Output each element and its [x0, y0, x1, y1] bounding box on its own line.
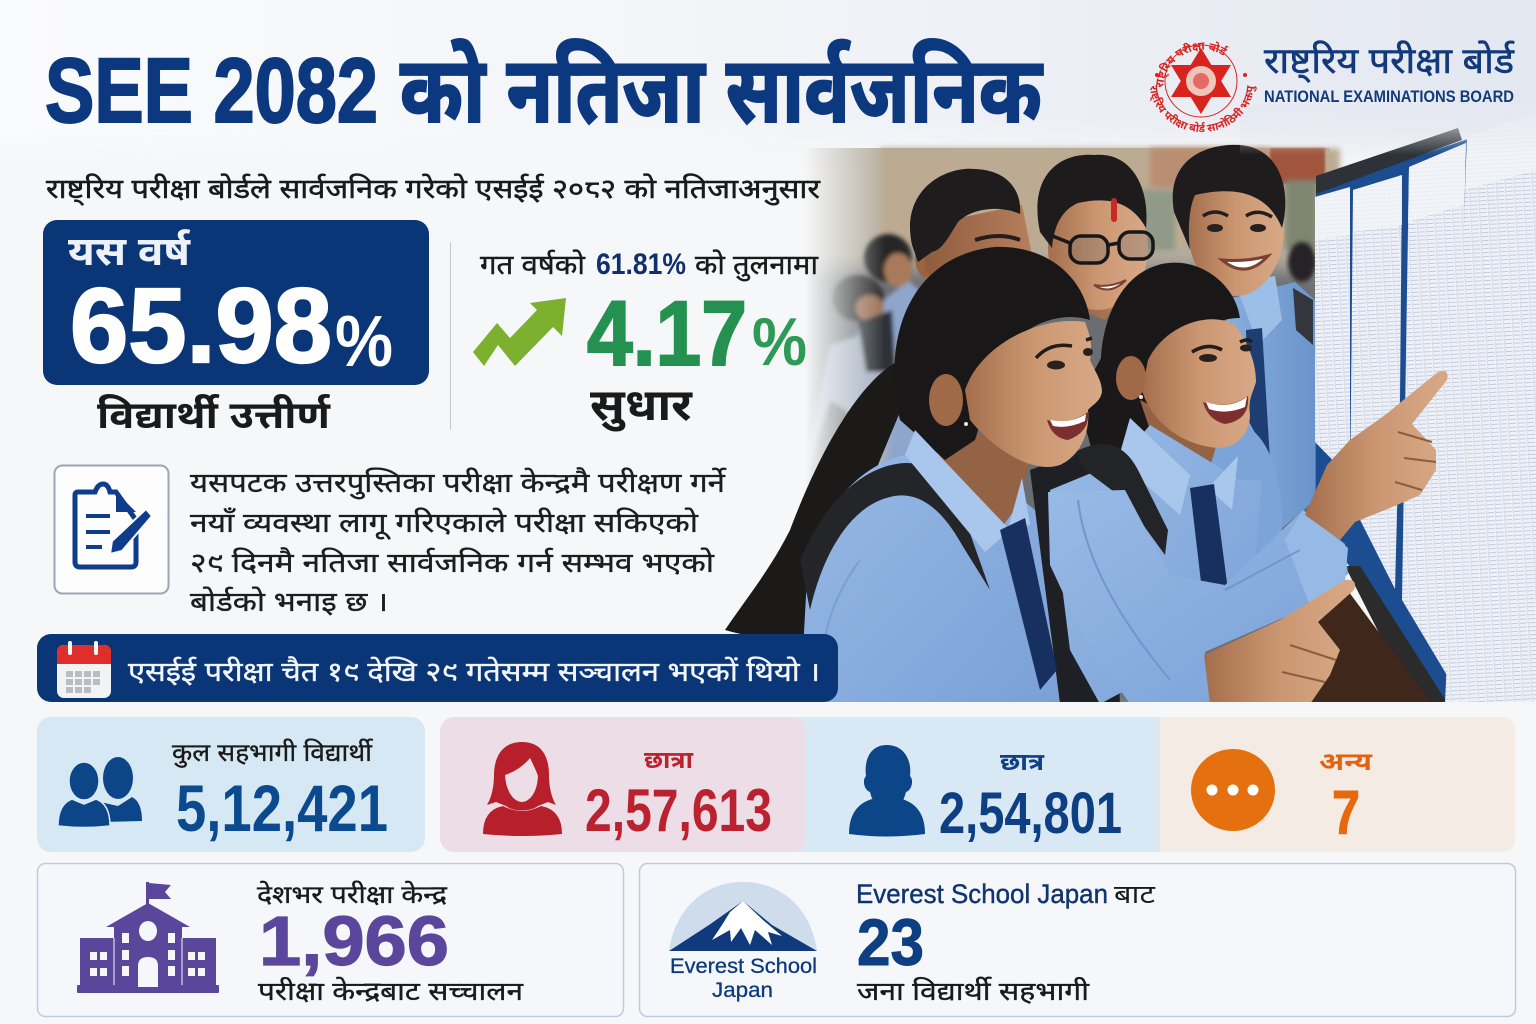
shirt body	[1050, 425, 1262, 704]
organisation name	[1264, 40, 1515, 106]
results sheet 1	[1315, 187, 1350, 478]
panel: exam centres	[38, 864, 624, 1016]
neck	[1140, 400, 1218, 500]
student: boy left	[910, 169, 1040, 300]
improvement figure: %	[752, 304, 807, 380]
text block: new evaluation system: यसपटक उत्तरपुस्तिका परीक्षा केन्द्रमै परीक्षण गर्ने	[190, 467, 727, 500]
panel: this year's pass rate: यस वर्ष	[68, 229, 191, 274]
hand: pointing lower	[1204, 580, 1355, 704]
callout banner: exam dates: एसईई परीक्षा चैत १९ देखि २९ गतेसम्म सञ्चालन भएकों थियो ।	[128, 656, 820, 687]
panel: Everest School Japan	[640, 864, 1516, 1016]
results sheet 3	[1402, 143, 1466, 677]
panel: Everest School Japan: बाट	[1114, 879, 1156, 909]
title: को नतिजा सार्वजनिक	[400, 39, 1043, 142]
backpack strap	[1075, 444, 1168, 555]
student: boy right	[1173, 145, 1315, 530]
panel: boys: 2,54,801	[939, 781, 1122, 846]
text block: new evaluation system: बोर्डको भनाइ छ ।	[190, 586, 388, 617]
label: improvement: सुधार	[590, 381, 694, 432]
callout banner: exam dates	[37, 634, 838, 702]
label: students passed: विद्यार्थी उत्तीर्ण	[97, 393, 332, 437]
photo: students reading results on notice board	[725, 105, 1536, 710]
ponytail	[725, 360, 905, 640]
panel: girls: 2,57,613	[585, 777, 772, 844]
panel: total students: 5,12,421	[176, 771, 388, 845]
collar	[905, 430, 1010, 552]
results sheet 4	[1445, 113, 1536, 704]
icon: calendar	[57, 641, 111, 698]
panel: boys	[780, 717, 1160, 852]
organisation name: राष्ट्रिय परीक्षा बोर्ड	[1264, 40, 1515, 83]
panel: total students: कुल सहभागी विद्यार्थी	[172, 738, 374, 768]
icon: female silhouette	[483, 742, 562, 836]
shoulder and far sleeve behind	[1180, 420, 1282, 640]
shirt	[800, 432, 1060, 704]
icon: two people	[58, 757, 142, 828]
logo: Everest School mountain: Japan	[712, 979, 773, 1002]
panel: boys: छात्र	[1000, 749, 1045, 776]
panel: others: 7	[1332, 779, 1360, 848]
icon: rising green arrow	[473, 298, 566, 366]
panel: exam centres: देशभर परीक्षा केन्द्र	[257, 879, 448, 909]
icon: male silhouette	[849, 745, 925, 836]
collar	[1118, 418, 1190, 515]
student: girl right	[1048, 263, 1348, 704]
title: SEE 2082	[45, 40, 378, 142]
hair	[1101, 263, 1240, 450]
sleeve raised to board	[1048, 490, 1348, 704]
panel: this year's pass rate	[43, 220, 429, 385]
comparison with last year	[480, 248, 819, 282]
panel: this year's pass rate: %	[335, 302, 393, 382]
strip below photo	[780, 702, 1536, 714]
panel: this year's pass rate: 65.98	[70, 267, 332, 385]
panel: girls	[440, 717, 806, 852]
tie	[1000, 518, 1057, 690]
icon: school building	[77, 882, 219, 993]
panel: exam centres: परीक्षा केन्द्रबाट सच्चालन	[258, 976, 524, 1006]
strap	[800, 463, 990, 610]
logo: National Examinations Board seal	[1150, 42, 1257, 132]
text block: new evaluation system	[190, 467, 727, 617]
panel: others	[1160, 717, 1515, 852]
comparison with last year: गत वर्षको	[480, 249, 586, 280]
improvement figure: 4.17	[587, 283, 747, 385]
background students, blurred	[814, 230, 920, 465]
panel: others: अन्य	[1319, 748, 1373, 776]
soft fade at photo top	[1240, 105, 1536, 155]
panel: girls: छात्रा	[644, 747, 694, 774]
photo backdrop: blurred school building	[790, 148, 1340, 710]
subtitle: राष्ट्रिय परीक्षा बोर्डले सार्वजनिक गरेको एसईई २०८२ को नतिजाअनुसार	[46, 173, 821, 206]
notice board	[1280, 113, 1536, 704]
panel: total students	[37, 717, 425, 852]
page background	[973, 0, 1536, 140]
logo: Everest School mountain	[669, 882, 817, 1002]
panel: Everest School Japan: 23	[857, 905, 924, 979]
icon: document and pen	[54, 466, 168, 594]
text block: new evaluation system: नयाँ व्यवस्था लागू गरिएकाले परीक्षा सकिएको	[190, 507, 699, 540]
tie	[1190, 484, 1229, 608]
dark hair and bags between students	[1030, 440, 1120, 704]
results sheet 2	[1350, 175, 1402, 589]
logo: Everest School mountain: Everest School	[670, 955, 817, 978]
logo: National Examinations Board seal: राष्ट्रिय परीक्षा बोर्ड	[1156, 42, 1229, 88]
face	[965, 321, 1102, 467]
panel: Everest School Japan: Everest School Japan	[856, 879, 1108, 909]
student: girl left	[725, 247, 1102, 704]
neck	[935, 410, 1030, 530]
panel: exam centres: 1,966	[259, 902, 449, 980]
icon: orange circle with dots	[1191, 749, 1275, 831]
hair	[894, 247, 1090, 460]
student: boy with glasses	[1037, 155, 1153, 320]
comparison with last year: को तुलनामा	[695, 250, 819, 282]
face	[1142, 319, 1256, 448]
text block: new evaluation system: २९ दिनमै नतिजा सार्वजनिक गर्न सम्भव भएको	[190, 547, 715, 578]
comparison with last year: 61.81%	[596, 248, 686, 281]
hand: pointing at results	[1305, 371, 1448, 540]
title	[45, 39, 1043, 142]
panel: Everest School Japan: जना विद्यार्थी सहभागी	[857, 976, 1090, 1006]
